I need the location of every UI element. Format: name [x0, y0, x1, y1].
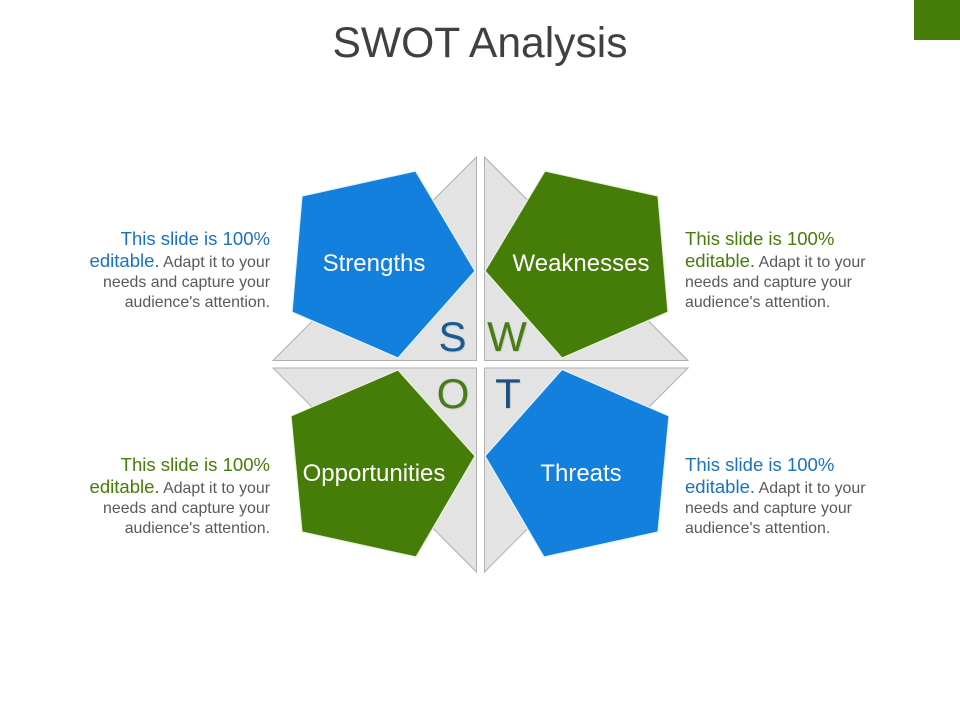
- panel: opportunities: Opportunities: [303, 460, 445, 487]
- centre letters S W O T: S: [438, 313, 467, 360]
- centre letters S W O T: [437, 313, 527, 417]
- text block: opportunities: [90, 454, 271, 537]
- text block: strengths: needs and capture your: [103, 274, 271, 291]
- panel: threats: Threats: [540, 460, 622, 487]
- text block: opportunities: audience's attention.: [125, 520, 270, 537]
- panel: weaknesses: Weaknesses: [513, 250, 649, 277]
- centre letters S W O T: T: [495, 370, 521, 417]
- text block: threats: editable. Adapt it to your: [685, 476, 866, 497]
- centre letters S W O T: W: [487, 313, 527, 360]
- text block: strengths: editable. Adapt it to your: [90, 250, 271, 271]
- text block: weaknesses: needs and capture your: [685, 274, 853, 291]
- panel: weaknesses: [485, 171, 668, 358]
- text block: strengths: This slide is 100%: [121, 228, 270, 249]
- text block: threats: This slide is 100%: [685, 454, 834, 475]
- text block: threats: needs and capture your: [685, 500, 853, 517]
- panel: strengths: Strengths: [323, 250, 425, 277]
- text block: strengths: [90, 228, 271, 311]
- text block: opportunities: This slide is 100%: [121, 454, 270, 475]
- corner accent square: [914, 0, 960, 40]
- text block: strengths: audience's attention.: [125, 294, 270, 311]
- text block: opportunities: needs and capture your: [103, 500, 271, 517]
- text block: opportunities: editable. Adapt it to your: [90, 476, 271, 497]
- panel: strengths: [292, 171, 475, 358]
- text block: threats: [685, 454, 866, 537]
- text block: weaknesses: This slide is 100%: [685, 228, 834, 249]
- text block: threats: audience's attention.: [685, 520, 830, 537]
- text block: weaknesses: editable. Adapt it to your: [685, 250, 866, 271]
- text block: weaknesses: audience's attention.: [685, 294, 830, 311]
- centre letters S W O T: O: [437, 370, 469, 417]
- title: SWOT Analysis: [332, 19, 628, 67]
- diamond of four triangles: [273, 157, 688, 572]
- panel: opportunities: [291, 370, 475, 557]
- panel: threats: [485, 370, 669, 557]
- text block: weaknesses: [685, 228, 866, 311]
